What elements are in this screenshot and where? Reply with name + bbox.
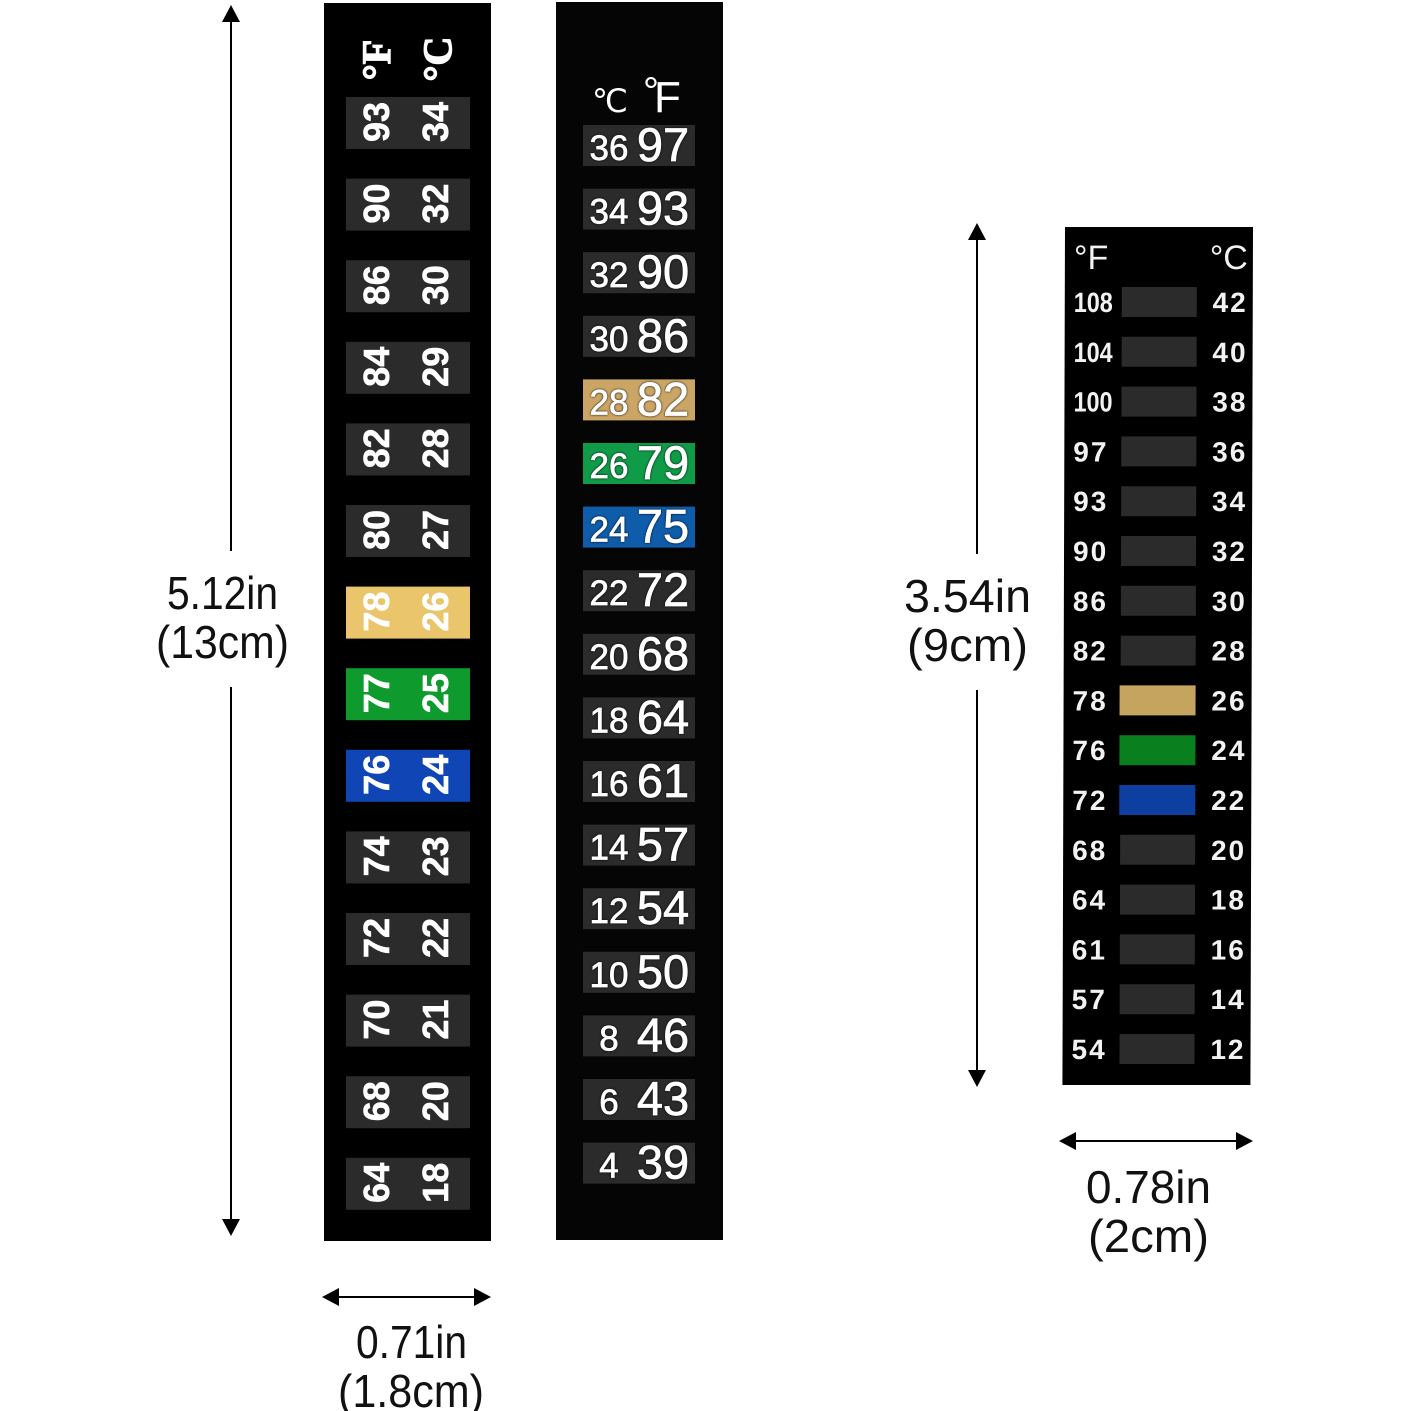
- row 20C 68F: 68: [637, 627, 689, 680]
- row 68F 20C: 20: [1211, 835, 1246, 866]
- row 64F 18C: 18: [415, 1163, 456, 1203]
- row 86F 30C: 30: [415, 265, 456, 305]
- row 16C 61F: 61: [637, 754, 689, 807]
- row 64F 18C: 18: [1211, 885, 1246, 916]
- row 6C 43F: 6: [599, 1083, 619, 1122]
- row 97F 36C: [1073, 436, 1247, 467]
- row 93F 34C: 93: [356, 102, 397, 142]
- row 6C 43F: 43: [637, 1072, 689, 1125]
- row 86F 30C: [1073, 586, 1247, 617]
- row 22C 72F: 22: [590, 574, 628, 613]
- row 30C 86F: 86: [637, 309, 689, 362]
- row 14C 57F: 57: [637, 818, 689, 871]
- row 16C 61F: [583, 754, 695, 807]
- row 57F 14C: 14: [1210, 984, 1246, 1015]
- row 24C 75F blue: 24: [590, 511, 628, 550]
- row 72F 22C blue: [1072, 785, 1246, 816]
- label: left strip height: 5.12in: [167, 567, 278, 619]
- row 18C 64F: [583, 690, 695, 743]
- row 104F 40C: 104: [1074, 337, 1113, 368]
- row 76F 24C green: [1072, 735, 1246, 766]
- row 26C 79F green: 79: [637, 436, 689, 489]
- row 68F 20C: 68: [1072, 835, 1107, 866]
- row 72F 22C: 72: [356, 918, 397, 958]
- row 100F 38C: 38: [1212, 387, 1248, 418]
- label: right strip width: 0.78in: [1086, 1161, 1211, 1213]
- row 108F 42C: 42: [1213, 287, 1248, 318]
- row 18C 64F: 64: [637, 690, 689, 743]
- row 26C 79F green: 26: [590, 447, 628, 486]
- label: right strip height: 3.54in: [904, 570, 1031, 622]
- heading: unit labels: [592, 70, 681, 122]
- row 93F 34C: 93: [1073, 486, 1108, 517]
- label: left strip width: 0.71in: [356, 1316, 467, 1368]
- row 26C 79F green: [583, 436, 695, 489]
- row 20C 68F: [583, 627, 695, 680]
- row 10C 50F: 10: [590, 956, 628, 995]
- label: left strip height: (13cm): [156, 616, 289, 668]
- row 64F 18C: 64: [1072, 885, 1107, 916]
- row 90F 32C: 90: [1073, 536, 1108, 567]
- row 28C 82F tan: 28: [590, 383, 628, 422]
- row 78F 26C yellow: [346, 587, 470, 639]
- row 90F 32C: 32: [1212, 536, 1247, 567]
- row 12C 54F: 54: [637, 881, 689, 934]
- row 70F 21C: 21: [415, 1000, 456, 1040]
- row 90F 32C: [1073, 536, 1247, 567]
- row 24C 75F blue: [583, 500, 695, 553]
- row 76F 24C blue: 76: [356, 755, 397, 795]
- row 82F 28C: 82: [356, 428, 397, 468]
- row 4C 39F: 4: [599, 1147, 619, 1186]
- row 57F 14C: 57: [1072, 984, 1107, 1015]
- row 78F 26C yellow: 78: [356, 592, 397, 632]
- row 8C 46F: 46: [637, 1008, 689, 1061]
- row 93F 34C: 34: [415, 102, 456, 142]
- row 32C 90F: [583, 245, 695, 298]
- row 54F 12C: 12: [1210, 1034, 1246, 1065]
- row 86F 30C: [346, 260, 470, 312]
- row 82F 28C: 82: [1073, 636, 1108, 667]
- panel: right horizontal-row strip thermometer: [1062, 227, 1253, 1085]
- row 68F 20C: 20: [415, 1081, 456, 1121]
- row 4C 39F: 39: [637, 1136, 689, 1189]
- row 104F 40C: 40: [1212, 337, 1248, 368]
- row 108F 42C: [1074, 287, 1248, 318]
- row 64F 18C: 64: [356, 1163, 397, 1203]
- row 22C 72F: 72: [637, 563, 689, 616]
- row 74F 23C: 74: [356, 836, 397, 876]
- row 68F 20C: [346, 1076, 470, 1128]
- label: right strip height: (9cm): [907, 619, 1028, 671]
- row 14C 57F: 14: [590, 829, 628, 868]
- row 34C 93F: 93: [637, 182, 689, 235]
- heading: unit labels: °F: [1074, 239, 1108, 277]
- row 30C 86F: 30: [590, 320, 628, 359]
- heading: unit labels: °C: [1210, 239, 1248, 277]
- row 82F 28C: 28: [415, 428, 456, 468]
- row 36C 97F: [583, 118, 695, 171]
- row 70F 21C: [346, 995, 470, 1047]
- row 90F 32C: [346, 179, 470, 231]
- label: left strip width: [338, 1316, 484, 1411]
- panel: left vertical strip thermometer: [324, 3, 491, 1241]
- arrow: left strip height: [222, 5, 240, 1236]
- row 78F 26C tan: [1073, 685, 1247, 716]
- row 100F 38C: 100: [1073, 387, 1113, 418]
- row 72F 22C: [346, 913, 470, 965]
- row 61F 16C: 16: [1211, 934, 1246, 965]
- row 18C 64F: 18: [590, 701, 628, 740]
- row 10C 50F: [583, 945, 695, 998]
- arrow: left strip width: [322, 1288, 491, 1306]
- row 30C 86F: [583, 309, 695, 362]
- row 82F 28C: [1073, 636, 1247, 667]
- row 57F 14C: [1072, 984, 1246, 1015]
- row 104F 40C: [1074, 337, 1248, 368]
- row 93F 34C: 34: [1212, 486, 1247, 517]
- row 90F 32C: 32: [415, 184, 456, 224]
- row 82F 28C: 28: [1212, 636, 1247, 667]
- row 77F 25C green: 77: [356, 673, 397, 713]
- row 78F 26C tan: 78: [1073, 685, 1108, 716]
- label: right strip width: [1086, 1161, 1211, 1262]
- row 93F 34C: [1073, 486, 1247, 517]
- row 34C 93F: 34: [590, 193, 628, 232]
- heading: unit labels: F: [654, 73, 681, 122]
- row 84F 29C: 29: [415, 347, 456, 387]
- row 61F 16C: [1072, 934, 1246, 965]
- row 72F 22C: 22: [415, 918, 456, 958]
- row 12C 54F: 12: [590, 892, 628, 931]
- row 84F 29C: [346, 342, 470, 394]
- row 76F 24C blue: [346, 750, 470, 802]
- row 28C 82F tan: 82: [637, 372, 689, 425]
- heading: rotated unit labels: [354, 37, 460, 81]
- row 86F 30C: 30: [1212, 586, 1247, 617]
- heading: unit labels: [1074, 239, 1248, 277]
- row 97F 36C: 97: [1073, 436, 1109, 467]
- row 78F 26C tan: 26: [1211, 685, 1247, 716]
- row 8C 46F: [583, 1008, 695, 1061]
- row 74F 23C: [346, 831, 470, 883]
- row 10C 50F: 50: [637, 945, 689, 998]
- row 14C 57F: [583, 818, 695, 871]
- row 34C 93F: [583, 182, 695, 235]
- row 100F 38C: [1073, 387, 1248, 418]
- row 54F 12C: 54: [1071, 1034, 1107, 1065]
- row 76F 24C green: 24: [1211, 735, 1246, 766]
- row 97F 36C: 36: [1212, 436, 1247, 467]
- row 80F 27C: [346, 505, 470, 557]
- heading: unit labels: °: [643, 70, 659, 114]
- row 32C 90F: 32: [590, 256, 628, 295]
- row 70F 21C: 70: [356, 1000, 397, 1040]
- row 72F 22C blue: 72: [1072, 785, 1107, 816]
- row 54F 12C: [1071, 1034, 1246, 1065]
- row 93F 34C: [346, 97, 470, 149]
- arrow: right strip height: [968, 223, 986, 1087]
- row 16C 61F: 16: [590, 765, 628, 804]
- row 76F 24C green: 76: [1072, 735, 1108, 766]
- row 90F 32C: 90: [356, 184, 397, 224]
- row 22C 72F: [583, 563, 695, 616]
- heading: unit labels: ℃: [592, 83, 628, 119]
- row 4C 39F: [583, 1136, 695, 1189]
- row 20C 68F: 20: [590, 638, 628, 677]
- row 36C 97F: 97: [637, 118, 689, 171]
- row 77F 25C green: [346, 668, 470, 720]
- heading: rotated unit labels: °F: [354, 40, 399, 80]
- row 68F 20C: 68: [356, 1081, 397, 1121]
- label: left strip height: [156, 567, 289, 668]
- row 74F 23C: 23: [415, 836, 456, 876]
- row 36C 97F: 36: [590, 129, 628, 168]
- label: right strip height: [904, 570, 1031, 671]
- row 64F 18C: [346, 1158, 470, 1210]
- row 82F 28C: [346, 423, 470, 475]
- heading: rotated unit labels: °C: [415, 37, 460, 81]
- row 78F 26C yellow: 26: [415, 592, 456, 632]
- row 24C 75F blue: 75: [637, 500, 689, 553]
- row 80F 27C: 80: [356, 510, 397, 550]
- row 68F 20C: [1072, 835, 1246, 866]
- row 72F 22C blue: 22: [1211, 785, 1246, 816]
- arrow: right strip width: [1059, 1132, 1253, 1150]
- panel: middle vertical strip thermometer: [556, 2, 723, 1240]
- row 12C 54F: [583, 881, 695, 934]
- row 32C 90F: 90: [637, 245, 689, 298]
- row 76F 24C blue: 24: [415, 755, 456, 795]
- row 80F 27C: 27: [415, 510, 456, 550]
- row 84F 29C: 84: [356, 347, 397, 387]
- label: right strip width: (2cm): [1088, 1210, 1209, 1262]
- row 86F 30C: 86: [1073, 586, 1108, 617]
- row 108F 42C: 108: [1074, 287, 1113, 318]
- row 64F 18C: [1072, 885, 1246, 916]
- row 8C 46F: 8: [599, 1019, 619, 1058]
- row 28C 82F tan: [583, 372, 695, 425]
- row 86F 30C: 86: [356, 265, 397, 305]
- row 77F 25C green: 25: [415, 673, 456, 713]
- row 61F 16C: 61: [1072, 934, 1107, 965]
- row 6C 43F: [583, 1072, 695, 1125]
